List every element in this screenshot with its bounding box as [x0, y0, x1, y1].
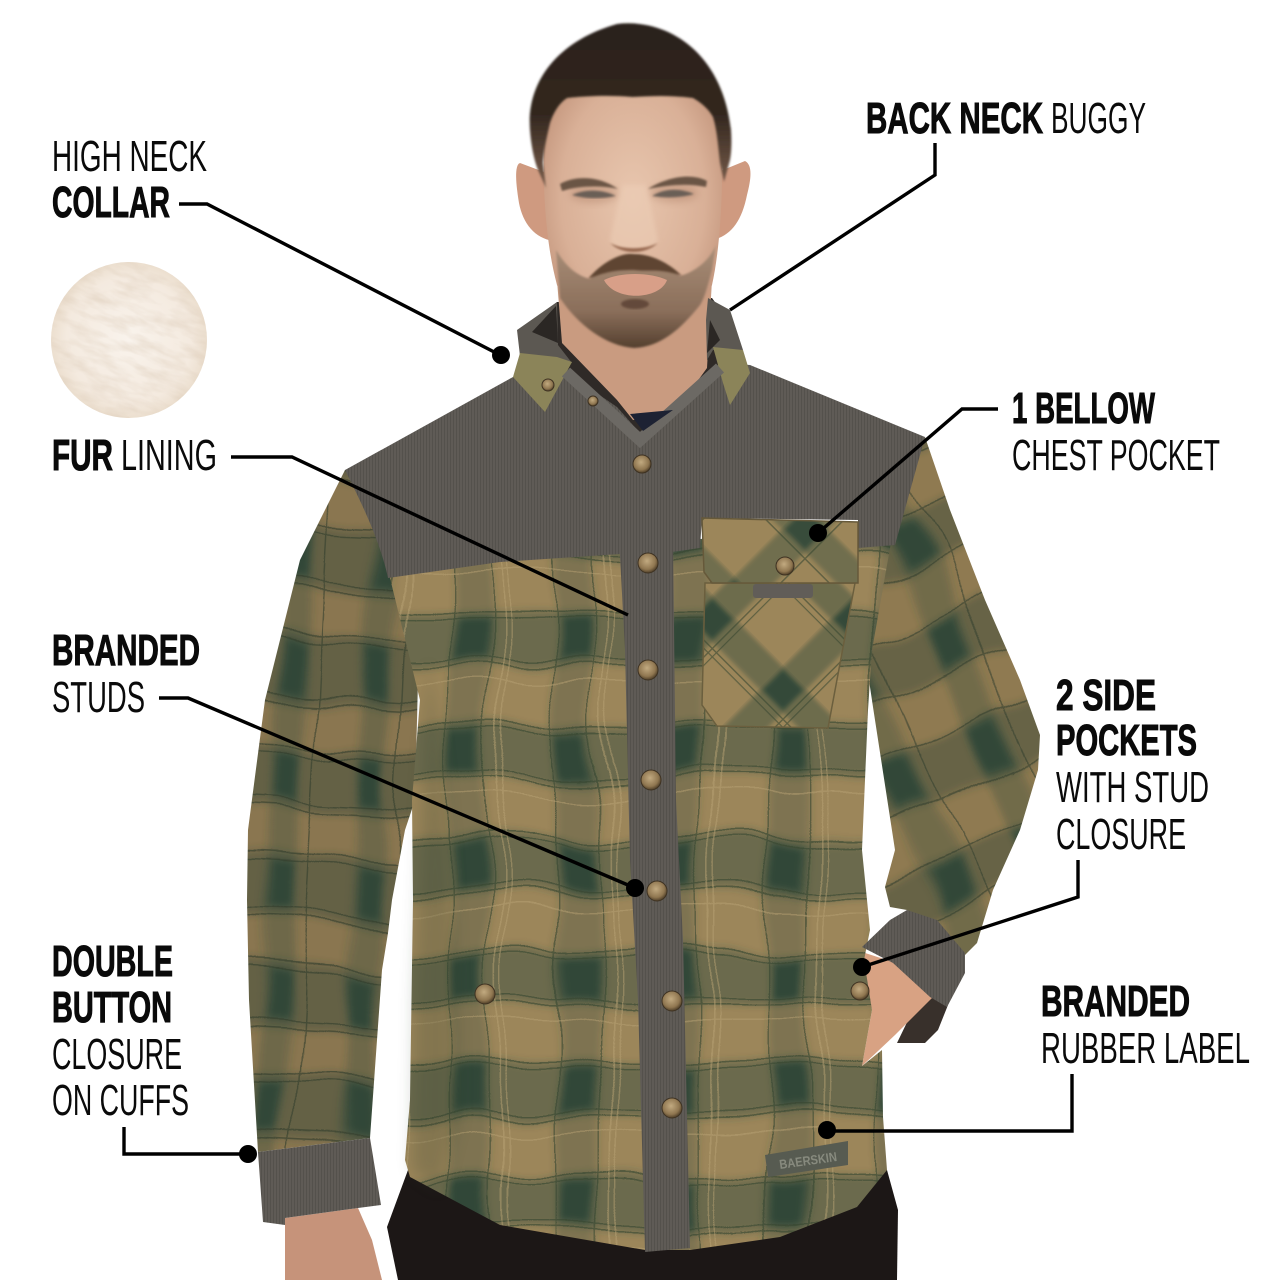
label: 1 bellow chest pocket: 1 BELLOW	[1012, 384, 1155, 433]
chest pocket body	[702, 583, 855, 728]
right cuff lining	[897, 985, 948, 1043]
mustache	[588, 254, 682, 279]
collar right	[706, 298, 750, 405]
fur swatch	[51, 262, 207, 418]
label: high neck collar: HIGH NECK	[52, 132, 207, 181]
leader: rubber label	[818, 1074, 1072, 1139]
label: fur lining	[52, 431, 217, 480]
label: double button closure: CLOSURE	[52, 1030, 182, 1079]
label: double button closure: ON CUFFS	[52, 1076, 189, 1125]
man: head and neck	[516, 23, 750, 440]
jacket	[200, 184, 1068, 1252]
label: branded studs: STUDS	[52, 673, 145, 722]
label: back neck buggy: BACK NECK	[866, 94, 1043, 143]
label: fur lining: LINING	[121, 431, 217, 480]
body	[390, 538, 890, 1250]
label: branded rubber label: BRANDED	[1041, 977, 1190, 1026]
hand: left bottom	[285, 1208, 382, 1280]
nose	[610, 185, 658, 250]
buttons	[475, 379, 869, 1118]
collar interior	[525, 298, 735, 440]
leader: side pockets	[853, 860, 1078, 976]
leader: cuffs	[124, 1127, 257, 1163]
label: fur lining: FUR	[52, 431, 113, 480]
pants	[387, 1170, 898, 1280]
mouth	[604, 274, 667, 296]
eye sockets	[570, 184, 698, 203]
left sleeve	[247, 470, 418, 1152]
label: double button closure: DOUBLE	[52, 937, 173, 986]
collar left	[513, 302, 572, 412]
pocket tab	[753, 584, 813, 598]
rubber label	[765, 1141, 848, 1177]
label: 1 bellow chest pocket	[1012, 384, 1220, 480]
label: branded rubber label	[1041, 977, 1250, 1073]
label: branded studs	[52, 626, 200, 722]
corduroy yoke	[345, 363, 925, 578]
undershirt	[630, 410, 673, 431]
label: high neck collar	[52, 132, 207, 227]
label: 2 side pockets	[1056, 671, 1209, 859]
label: high neck collar: COLLAR	[52, 178, 170, 227]
beard	[556, 245, 716, 348]
label: 2 side pockets: CLOSURE	[1056, 810, 1186, 859]
label: branded studs: BRANDED	[52, 626, 200, 675]
eyes	[572, 190, 694, 198]
placket	[620, 425, 690, 1252]
label: 2 side pockets: 2 SIDE	[1056, 671, 1156, 720]
neck	[557, 280, 712, 420]
right ear	[716, 161, 750, 239]
leader: fur lining	[231, 457, 628, 615]
leader: collar	[179, 204, 510, 364]
hair	[530, 23, 731, 188]
label: double button closure	[52, 937, 189, 1125]
rubber label: BAERSKIN	[778, 1149, 838, 1172]
lapels	[566, 368, 720, 440]
left ear	[516, 163, 553, 241]
chest pocket flap	[702, 518, 858, 583]
side panel shadows	[412, 660, 458, 1190]
leader: back neck	[730, 143, 935, 310]
right sleeve	[870, 437, 1040, 955]
right cuff	[862, 910, 965, 1007]
leader: chest pocket	[809, 409, 998, 542]
leader: studs	[159, 698, 644, 897]
left cuff	[258, 1138, 381, 1225]
label: double button closure: BUTTON	[52, 983, 172, 1032]
label: back neck buggy: BUGGY	[1051, 94, 1146, 143]
eyebrows	[560, 177, 707, 191]
chin patch	[621, 299, 649, 309]
hand in pocket	[862, 952, 932, 1066]
label: 2 side pockets: POCKETS	[1056, 716, 1197, 765]
face	[544, 74, 722, 347]
